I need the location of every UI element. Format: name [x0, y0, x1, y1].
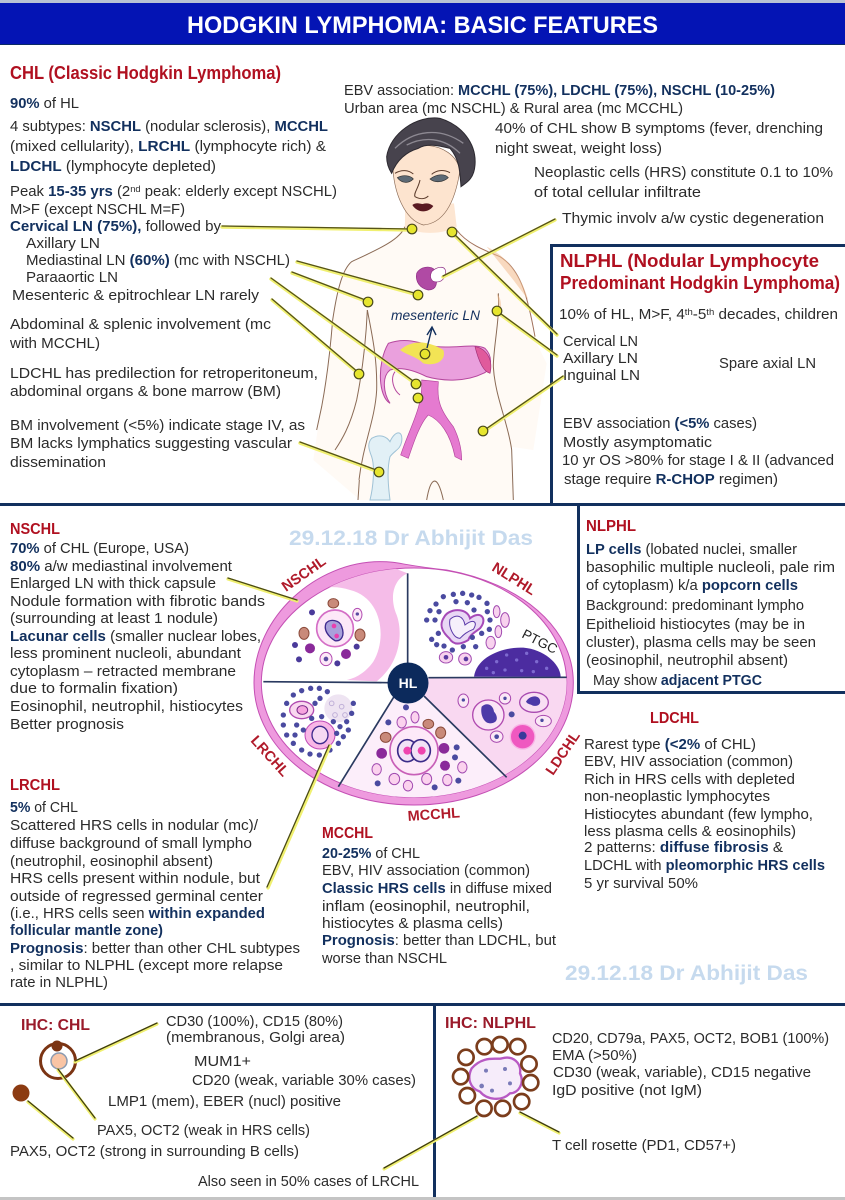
text block: CHL features: BM involvement (<5%) indicate stage IV, as — [10, 418, 305, 434]
text block: NSCHL: Nodule formation with fibrotic bands — [10, 594, 265, 610]
text block: EBV and epidemiology: Thymic involv a/w cystic degeneration — [562, 211, 824, 227]
text block: MCCHL: Classic HRS cells in diffuse mixed — [322, 881, 552, 897]
panel: NLPHL overview: decades, children — [714, 307, 838, 323]
text block: CHL features — [9, 96, 337, 471]
cell group: LDCHL pleomorphic cells — [458, 692, 551, 749]
text block: LRCHL: , similar to NLPHL (except more relapse — [10, 958, 283, 974]
panel: NLPHL overview: Spare axial LN — [719, 356, 816, 372]
text block: NSCHL: 70% of CHL (Europe, USA) — [10, 541, 189, 557]
text block: CHL features: Mediastinal LN (60%) (mc with NSCHL) — [26, 253, 290, 269]
sector labels — [247, 553, 584, 825]
neck — [405, 203, 457, 233]
panel: IHC CHL — [10, 1014, 559, 1190]
sector: MCCHL — [341, 696, 504, 798]
text block: LDCHL: EBV, HIV association (common) — [584, 754, 793, 770]
panel: IHC CHL: PAX5, OCT2 (strong in surrounding B cells) — [10, 1144, 299, 1160]
sector labels: LRCHL — [247, 733, 292, 780]
icon: face and hair — [387, 118, 475, 225]
text block: NSCHL: Lacunar cells (smaller nuclear lobes, — [10, 629, 261, 645]
sector: LDCHL — [424, 677, 570, 777]
cell group: NLPHL popcorn cell — [424, 591, 509, 665]
text block: LDCHL: Rarest type (<2% of CHL) — [584, 737, 756, 753]
text block: NSCHL: cytoplasm – retracted membrane — [10, 664, 236, 680]
text block: CHL features: Abdominal & splenic involvement (mc — [10, 317, 271, 333]
text block: NLPHL morphology: Epithelioid histiocytes (may be in — [586, 617, 805, 633]
watermark: 29.12.18 Dr Abhijit Das — [289, 527, 533, 550]
text block: CHL features: Mesenteric & epitrochlear LN rarely — [12, 288, 260, 304]
text block: LDCHL: LDCHL — [650, 710, 699, 727]
text block: NSCHL: NSCHL — [10, 521, 60, 538]
panel: IHC NLPHL: IHC: NLPHL — [445, 1015, 536, 1032]
text block: MCCHL: worse than NSCHL — [321, 951, 447, 967]
text block: MCCHL: EBV, HIV association (common) — [322, 863, 530, 879]
text block: LRCHL: outside of regressed germinal center — [10, 889, 263, 905]
panel: NLPHL overview: Inguinal LN — [563, 368, 640, 384]
mesenteric LN label and arrow — [391, 307, 481, 348]
leader lines: body — [222, 219, 563, 472]
panel: NLPHL overview: Mostly asymptomatic — [563, 435, 712, 451]
icon: aorta and iliac arteries — [401, 380, 462, 460]
text block: LRCHL: LRCHL — [10, 777, 60, 794]
panel: NLPHL overview: NLPHL (Nodular Lymphocyte — [560, 251, 819, 271]
HL hub: HL — [399, 675, 418, 691]
panel: NLPHL overview: th — [706, 307, 714, 317]
text block: NSCHL — [10, 521, 265, 733]
panel: NLPHL overview: stage require R-CHOP regimen) — [564, 472, 778, 488]
text block: LRCHL — [10, 777, 300, 991]
cell group: NSCHL nodule — [292, 599, 365, 666]
text block: CHL features: BM lacks lymphatics suggesting vascular — [10, 436, 292, 452]
text block: NSCHL: 80% a/w mediastinal involvement — [10, 559, 232, 575]
text block: NSCHL: (surrounding at least 1 nodule) — [10, 611, 218, 627]
text block: NLPHL morphology: LP cells (lobated nuclei, smaller — [586, 542, 797, 558]
text block: LDCHL: non-neoplastic lymphocytes — [584, 789, 770, 805]
icon: stomach and colon — [380, 340, 490, 403]
panel: NLPHL overview — [559, 251, 840, 488]
text block: LDCHL: Histiocytes abundant (few lympho, — [584, 807, 813, 823]
text block: EBV and epidemiology: Urban area (mc NSCHL) & Rural area (mc MCCHL) — [344, 101, 683, 117]
text block: LRCHL: (i.e., HRS cells seen within expanded — [10, 906, 265, 922]
panel: IHC CHL: CD30 (100%), CD15 (80%) — [166, 1014, 343, 1030]
text block: NSCHL: due to formalin fixation) — [10, 681, 178, 697]
panel: NLPHL overview: 10 yr OS >80% for stage I & II (advanced — [562, 453, 834, 469]
panel: NLPHL overview: Axillary LN — [563, 351, 638, 367]
text block: MCCHL: 20-25% of CHL — [322, 846, 420, 862]
text block: NLPHL morphology: May show adjacent PTGC — [593, 673, 762, 689]
text block: MCCHL — [321, 825, 556, 967]
cell group: PTGC dome — [474, 648, 561, 677]
text block: CHL features: LDCHL (lymphocyte depleted) — [10, 159, 216, 175]
sector labels: NLPHL — [489, 560, 538, 599]
text block: NLPHL morphology: cluster), plasma cells may be seen — [586, 635, 816, 651]
text block: CHL features: with MCCHL) — [9, 336, 100, 352]
text block: LDCHL: 2 patterns: diffuse fibrosis & — [584, 840, 783, 856]
text block: NLPHL morphology: NLPHL — [586, 518, 636, 535]
text block: CHL features: 90% of HL — [10, 96, 79, 112]
text block: LDCHL: Rich in HRS cells with depleted — [584, 772, 795, 788]
leader lines: diagram — [228, 578, 330, 888]
text block: CHL features: 4 subtypes: NSCHL (nodular sclerosis), MCCHL — [10, 119, 328, 135]
text block: NSCHL: Eosinophil, neutrophil, histiocytes — [10, 699, 243, 715]
text block: EBV and epidemiology — [344, 83, 833, 227]
text block: NLPHL morphology — [586, 518, 835, 689]
text block: EBV and epidemiology: EBV association: MCCHL (75%), LDCHL (75%), NSCHL (10-25%) — [344, 83, 775, 99]
sector: NSCHL fibrous band — [329, 568, 408, 682]
text block: NSCHL: Better prognosis — [10, 717, 124, 733]
text block: NLPHL morphology: of cytoplasm) k/a popcorn cells — [586, 578, 798, 594]
text block: NSCHL: Enlarged LN with thick capsule — [10, 576, 216, 592]
text block: EBV and epidemiology: Neoplastic cells (HRS) constitute 0.1 to 10% — [534, 165, 833, 181]
header banner — [0, 0, 845, 45]
panel: IHC CHL: PAX5, OCT2 (weak in HRS cells) — [97, 1123, 310, 1139]
text block: CHL features: Peak 15-35 yrs (2 — [10, 184, 130, 200]
text block: NLPHL morphology: (eosinophil, neutrophil absent) — [586, 653, 788, 669]
cell group: LRCHL nodule — [281, 686, 356, 758]
text block: EBV and epidemiology: 40% of CHL show B symptoms (fever, drenching — [495, 121, 823, 137]
text block: CHL features: dissemination — [10, 455, 106, 471]
text block: CHL features: nd — [130, 184, 141, 194]
title: HODGKIN LYMPHOMA: BASIC FEATURES — [187, 12, 658, 39]
text block: CHL features: abdominal organs & bone marrow (BM) — [10, 384, 281, 400]
text block: EBV and epidemiology: of total cellular infiltrate — [534, 185, 701, 201]
text block: LRCHL: rate in NLPHL) — [10, 975, 108, 991]
HL hub — [388, 662, 428, 704]
sector labels: LDCHL — [543, 728, 584, 778]
panel: IHC NLPHL: CD30 (weak, variable), CD15 negative — [553, 1065, 811, 1081]
sector labels: MCCHL — [407, 805, 461, 825]
panel: IHC CHL: CD20 (weak, variable 30% cases) — [192, 1073, 416, 1089]
panel: IHC CHL: Also seen in 50% cases of LRCHL — [198, 1174, 419, 1190]
watermark: 29.12.18 Dr Abhijit Das — [565, 962, 808, 985]
text block: LRCHL: 5% of CHL — [10, 800, 78, 816]
text block: MCCHL: histiocytes & plasma cells) — [322, 916, 503, 932]
panel: IHC NLPHL: IgD positive (not IgM) — [552, 1083, 702, 1099]
text block: NLPHL morphology: basophilic multiple nucleoli, pale rim — [586, 560, 835, 576]
text block: LRCHL: (neutrophil, eosinophil absent) — [10, 854, 213, 870]
panel: IHC CHL: (membranous, Golgi area) — [166, 1030, 345, 1046]
text block: MCCHL: MCCHL — [322, 825, 373, 842]
panel: IHC NLPHL: T cell rosette (PD1, CD57+) — [552, 1138, 736, 1154]
body illustration — [313, 118, 547, 500]
icon: femur bone — [369, 433, 402, 500]
text block: LRCHL: follicular mantle zone) — [10, 923, 163, 939]
text block: LDCHL — [584, 710, 825, 892]
panel: IHC NLPHL: EMA (>50%) — [552, 1048, 637, 1064]
text block: LRCHL: Scattered HRS cells in nodular (mc)/ — [10, 818, 258, 834]
text block: LRCHL: Prognosis: better than other CHL subtypes — [10, 941, 300, 957]
torso and arms — [313, 222, 547, 500]
icon: HRS cell with surrounding B cell — [12, 1040, 76, 1102]
text block: CHL features: Paraaortic LN — [26, 270, 118, 286]
text block: CHL features: Cervical LN (75%), followed by — [10, 219, 222, 235]
panel: NLPHL overview: EBV association (<5% cases) — [563, 416, 757, 432]
text block: LDCHL: LDCHL with pleomorphic HRS cells — [584, 858, 825, 874]
sector labels: NSCHL — [279, 553, 329, 595]
panel: IHC CHL: MUM1+ — [194, 1054, 251, 1070]
text block: NLPHL morphology: Background: predominant lympho — [586, 598, 804, 614]
text block: LRCHL: HRS cells present within nodule, but — [10, 871, 260, 887]
text block: MCCHL: inflam (eosinophil, neutrophil, — [322, 899, 530, 915]
capsule — [254, 562, 573, 805]
histology ellipse diagram — [254, 560, 573, 807]
mesenteric LN label and arrow: mesenteric LN — [391, 307, 481, 323]
icon: thymus — [416, 267, 446, 290]
text block: CHL features: LDCHL has predilection for retroperitoneum, — [10, 366, 318, 382]
panel: IHC NLPHL: CD20, CD79a, PAX5, OCT2, BOB1 (100%) — [552, 1031, 829, 1047]
text block: MCCHL: Prognosis: better than LDCHL, but — [322, 933, 556, 949]
panel: IHC NLPHL — [445, 1015, 829, 1154]
text block: CHL features: peak: elderly except NSCHL) — [141, 184, 337, 200]
text block: CHL features: (mixed cellularity), LRCHL (lymphocyte rich) & — [10, 139, 326, 155]
heading: CHL: CHL (Classic Hodgkin Lymphoma) — [10, 63, 281, 83]
text block: EBV and epidemiology: night sweat, weight loss) — [495, 141, 662, 157]
panel frame lines — [0, 244, 845, 1200]
panel: NLPHL overview: -5 — [693, 307, 706, 323]
lymph node markers — [354, 224, 502, 477]
text block: CHL features: Axillary LN — [26, 236, 100, 252]
text block: CHL features: M>F (except NSCHL M=F) — [10, 202, 185, 218]
panel: NLPHL overview: Cervical LN — [563, 334, 638, 350]
leader lines: IHC CHL — [28, 1023, 559, 1169]
cell group: MCCHL diagnostic cell — [372, 704, 467, 791]
panel: NLPHL overview: Predominant Hodgkin Lymphoma) — [560, 273, 840, 293]
text block: LDCHL: less plasma cells & eosinophils) — [584, 824, 796, 840]
icon: T cell rosette — [453, 1037, 538, 1116]
panel: NLPHL overview: th — [685, 307, 693, 317]
PTGC label: PTGC — [520, 626, 560, 657]
panel: NLPHL overview: 10% of HL, M>F, 4 — [559, 307, 678, 323]
text block: NSCHL: less prominent nucleoli, abundant — [10, 646, 241, 662]
text block: LRCHL: diffuse background of small lympho — [10, 836, 252, 852]
text block: LDCHL: 5 yr survival 50% — [584, 876, 698, 892]
panel: IHC CHL: LMP1 (mem), EBER (nucl) positive — [108, 1094, 341, 1110]
panel: IHC CHL: IHC: CHL — [21, 1017, 90, 1034]
